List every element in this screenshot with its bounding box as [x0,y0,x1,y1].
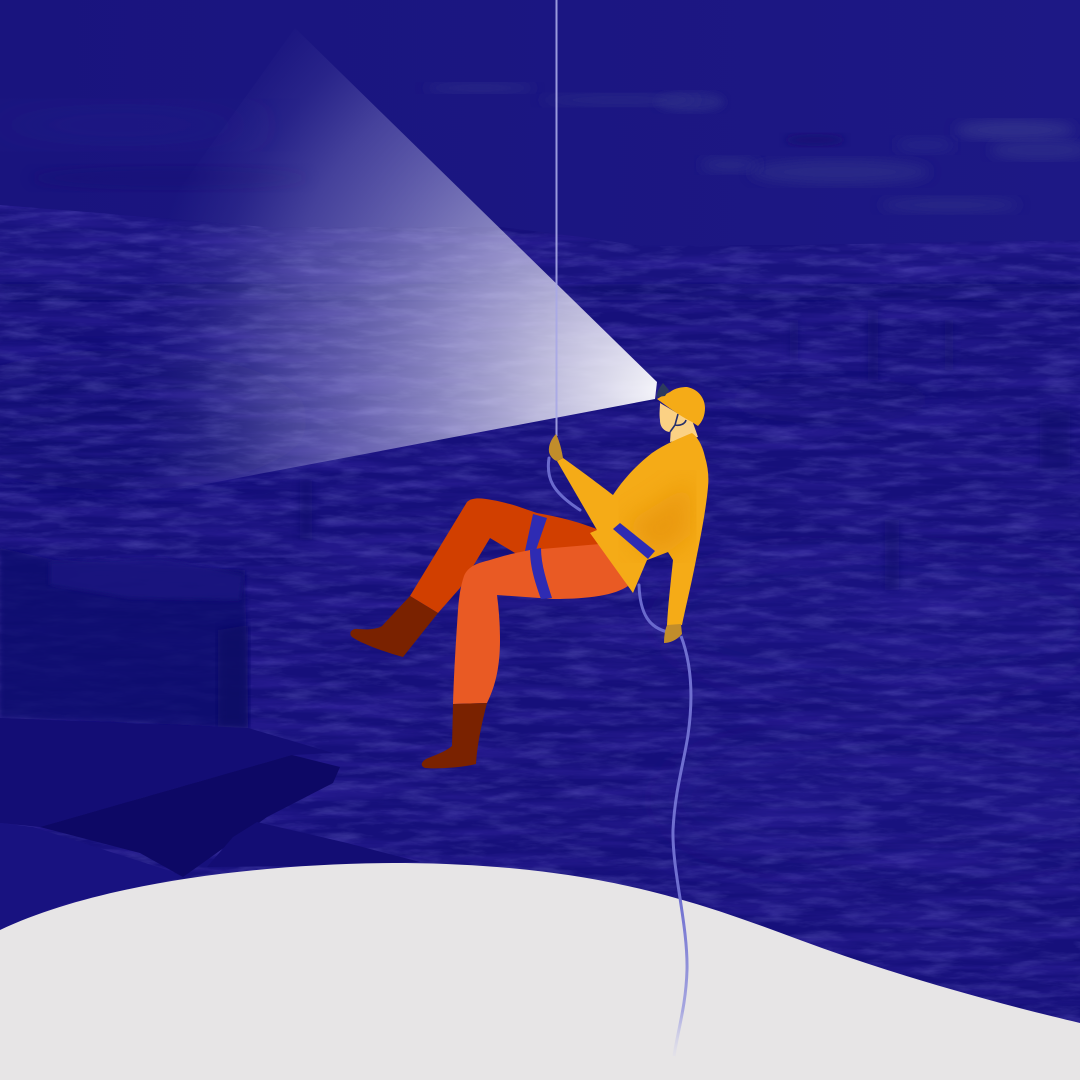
background: night sky with clouds [0,0,1080,260]
climber [350,383,708,768]
harness belt [613,523,655,559]
front boot [422,703,487,768]
snow hill [0,863,1080,1080]
front leg [453,544,628,704]
face [660,403,692,432]
front thigh strap [530,548,552,599]
headlamp [657,383,669,397]
lower glove [664,624,682,643]
jacket shading [632,491,692,559]
lower rope [673,636,691,1056]
background: foreground rocks [0,548,420,930]
rope behind the climber [548,458,668,632]
back boot [350,596,438,657]
distant mesa band [0,205,1080,300]
back thigh strap [525,514,547,551]
chin strap [670,414,686,432]
upper rope [556,0,558,436]
headlamp light beam [100,28,657,495]
neck [670,412,698,442]
vertical clefts in the far wall [300,310,1070,590]
back leg [410,498,610,613]
upper glove [549,434,563,461]
jacket [557,433,708,625]
helmet [657,387,705,426]
